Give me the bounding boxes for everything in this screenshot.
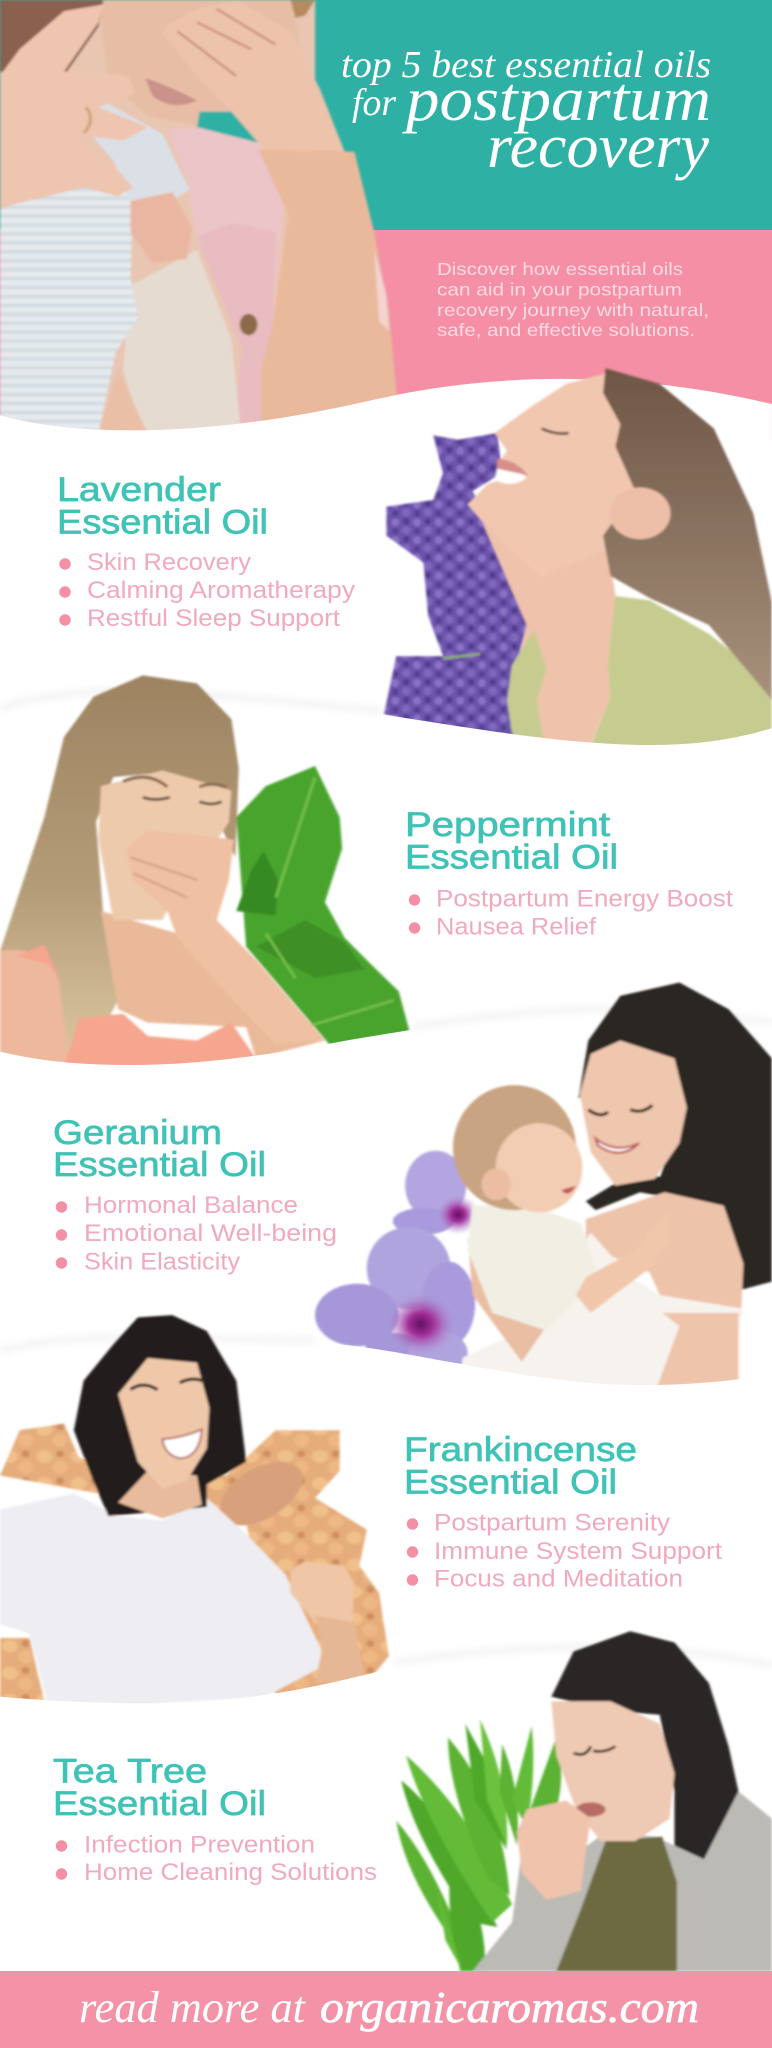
intro text: recovery journey with natural, xyxy=(437,300,709,320)
frankincense resin xyxy=(0,1424,389,1697)
chest xyxy=(101,911,325,1058)
panel text: lavender: Lavender xyxy=(57,471,221,509)
panel text: peppermint: Nausea Relief xyxy=(436,914,596,941)
intro text: Discover how essential oils xyxy=(437,259,683,279)
intro text xyxy=(437,259,709,340)
olive top xyxy=(556,1837,677,1971)
title xyxy=(341,44,711,181)
panel text: geranium xyxy=(53,1114,337,1276)
baby body xyxy=(468,1206,596,1331)
photo: woman inhaling lavender xyxy=(384,368,772,759)
panel text: tea tree xyxy=(53,1752,377,1886)
neck xyxy=(482,522,615,745)
panel text: frankincense: Focus and Meditation xyxy=(434,1566,683,1592)
panel text: geranium: Essential Oil xyxy=(53,1146,266,1184)
shirt xyxy=(507,596,772,759)
photo: laughing woman with frankincense resin xyxy=(0,1315,389,1710)
soft wave shadow: third wave xyxy=(414,1009,772,1027)
fist xyxy=(517,1801,591,1900)
peppermint leaves xyxy=(236,766,410,1045)
footer banner: read more at xyxy=(79,1983,307,2032)
title: postpartum xyxy=(402,66,711,134)
photo: mother holding baby, hand on face xyxy=(0,0,396,433)
panel text: lavender: Skin Recovery xyxy=(87,549,251,576)
baby head xyxy=(453,1085,576,1210)
panel text: geranium: Hormonal Balance xyxy=(84,1192,298,1219)
tea tree leaves xyxy=(396,1719,561,1971)
hair xyxy=(0,675,239,1065)
panel: pink intro background xyxy=(0,230,772,440)
panel text: peppermint: Essential Oil xyxy=(405,839,618,877)
mother's shoulder xyxy=(586,1192,743,1317)
panel text: peppermint xyxy=(405,806,733,941)
panel: teal header background xyxy=(0,0,772,230)
panel text: tea tree: Essential Oil xyxy=(53,1785,266,1823)
ear xyxy=(609,487,671,539)
title: for xyxy=(352,82,396,124)
hair xyxy=(603,368,772,700)
face xyxy=(98,770,231,920)
intro text: can aid in your postpartum xyxy=(437,280,682,300)
footer banner: organicaromas.com xyxy=(320,1983,699,2032)
forearm xyxy=(315,1615,364,1683)
panel text: lavender: Restful Sleep Support xyxy=(87,605,340,632)
shirt xyxy=(0,1494,325,1710)
panel text: tea tree: Tea Tree xyxy=(53,1752,207,1790)
face xyxy=(118,1358,209,1489)
photo: woman covering mouth with peppermint leaves xyxy=(0,675,410,1072)
intro text: safe, and effective solutions. xyxy=(437,320,695,340)
lavender flowers xyxy=(384,433,527,750)
title: recovery xyxy=(487,113,709,181)
panel text: frankincense: Frankincense xyxy=(404,1431,637,1469)
hair xyxy=(551,1631,738,1922)
baby arm xyxy=(576,1258,646,1314)
photo: woman coughing with tea tree leaves xyxy=(396,1631,772,1971)
panel text: tea tree: Home Cleaning Solutions xyxy=(84,1859,377,1886)
panel text: lavender xyxy=(57,471,355,632)
mother's white top xyxy=(458,1232,741,1393)
panel text: frankincense xyxy=(404,1431,722,1592)
soft wave shadow: fifth wave xyxy=(394,1647,772,1665)
sweater xyxy=(473,1792,772,1971)
panel text: frankincense: Immune System Support xyxy=(434,1538,722,1565)
panel text: peppermint: Postpartum Energy Boost xyxy=(436,886,733,913)
mother's hair xyxy=(578,982,772,1290)
face xyxy=(468,373,635,576)
face xyxy=(551,1701,674,1841)
mother's face xyxy=(580,1041,687,1186)
soft wave shadow: fourth wave xyxy=(0,1338,315,1351)
neck xyxy=(118,1471,202,1518)
shoulder xyxy=(0,950,69,1063)
photo: mother hugging baby with geranium flowers xyxy=(315,982,772,1393)
panel text: peppermint: Peppermint xyxy=(405,806,611,844)
hand xyxy=(126,831,325,1045)
tank top xyxy=(65,1012,256,1065)
panel text: lavender: Calming Aromatherapy xyxy=(87,577,355,604)
mother's left arm xyxy=(468,1237,546,1362)
panel text: lavender: Essential Oil xyxy=(57,504,268,542)
title: top 5 best essential oils xyxy=(341,44,711,86)
footer banner xyxy=(0,1971,772,2048)
panel text: frankincense: Postpartum Serenity xyxy=(434,1510,670,1536)
hair xyxy=(74,1315,246,1516)
fist xyxy=(290,1561,354,1629)
panel text: geranium: Emotional Well-being xyxy=(84,1220,337,1247)
panel text: tea tree: Infection Prevention xyxy=(84,1832,315,1858)
panel text: geranium: Skin Elasticity xyxy=(84,1248,240,1276)
soft wave shadow: second wave xyxy=(0,691,384,711)
panel text: frankincense: Essential Oil xyxy=(404,1464,617,1502)
panel text: geranium: Geranium xyxy=(53,1114,222,1152)
geranium flowers xyxy=(405,1151,466,1220)
